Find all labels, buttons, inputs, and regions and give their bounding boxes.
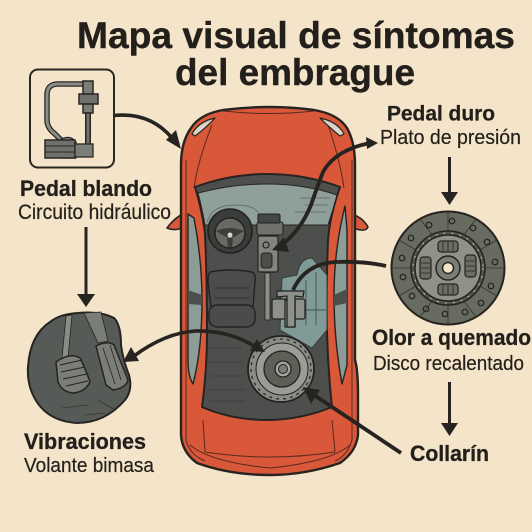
label: vibraciones (24, 429, 155, 477)
car top view (167, 107, 368, 475)
left mirror (167, 212, 186, 230)
cabin floor (195, 174, 340, 420)
arrow: collarín to clutch bearing (303, 387, 401, 453)
arrow: disc to gearbox (293, 262, 386, 290)
label: pedal duro: Pedal duro (387, 102, 495, 126)
arrow: pedal duro to shifter console (272, 137, 378, 252)
arrow: olor a quemado to collarín (441, 382, 458, 436)
clutch disc (392, 212, 504, 324)
label: pedal duro: Plato de presión (380, 126, 521, 149)
body contour lines (186, 111, 352, 468)
label: pedal blando: Circuito hidráulico (18, 201, 171, 224)
window pillars (188, 289, 347, 306)
left headlight (192, 118, 215, 136)
label: pedal blando (18, 176, 171, 224)
label: collarín: Collarín (410, 441, 489, 466)
car body (181, 107, 358, 475)
label: pedal duro (380, 102, 521, 149)
engine bay (280, 258, 327, 348)
arrow: pedal blando to pedals (77, 227, 95, 307)
pedals illustration (28, 312, 130, 423)
windshield details (207, 198, 330, 222)
label: vibraciones: Volante bimasa (24, 454, 155, 477)
clutch bearing assembly (248, 336, 314, 402)
label: vibraciones: Vibraciones (24, 429, 146, 454)
right side window (334, 206, 347, 384)
left side window (188, 214, 202, 384)
gear shifter console (258, 236, 278, 320)
title: del embrague (175, 52, 415, 93)
seat (208, 270, 255, 327)
dash console (257, 214, 283, 235)
right mirror (348, 213, 368, 230)
label: pedal blando: Pedal blando (20, 176, 152, 201)
arrow: pedal duro to disc (441, 157, 458, 205)
arrow: clutch to pedals (123, 331, 265, 362)
arrow: icon to car (114, 115, 181, 149)
hydraulic circuit icon box (30, 70, 114, 168)
title: Mapa visual de síntomas (77, 15, 515, 56)
right headlight (320, 118, 344, 136)
title (77, 15, 515, 93)
floor ribs (210, 272, 326, 401)
windshield (198, 184, 337, 225)
gearbox (272, 291, 305, 327)
steering wheel (208, 209, 252, 253)
label: olor a quemado: Disco recalentado (373, 353, 524, 375)
label: olor a quemado (372, 325, 531, 375)
